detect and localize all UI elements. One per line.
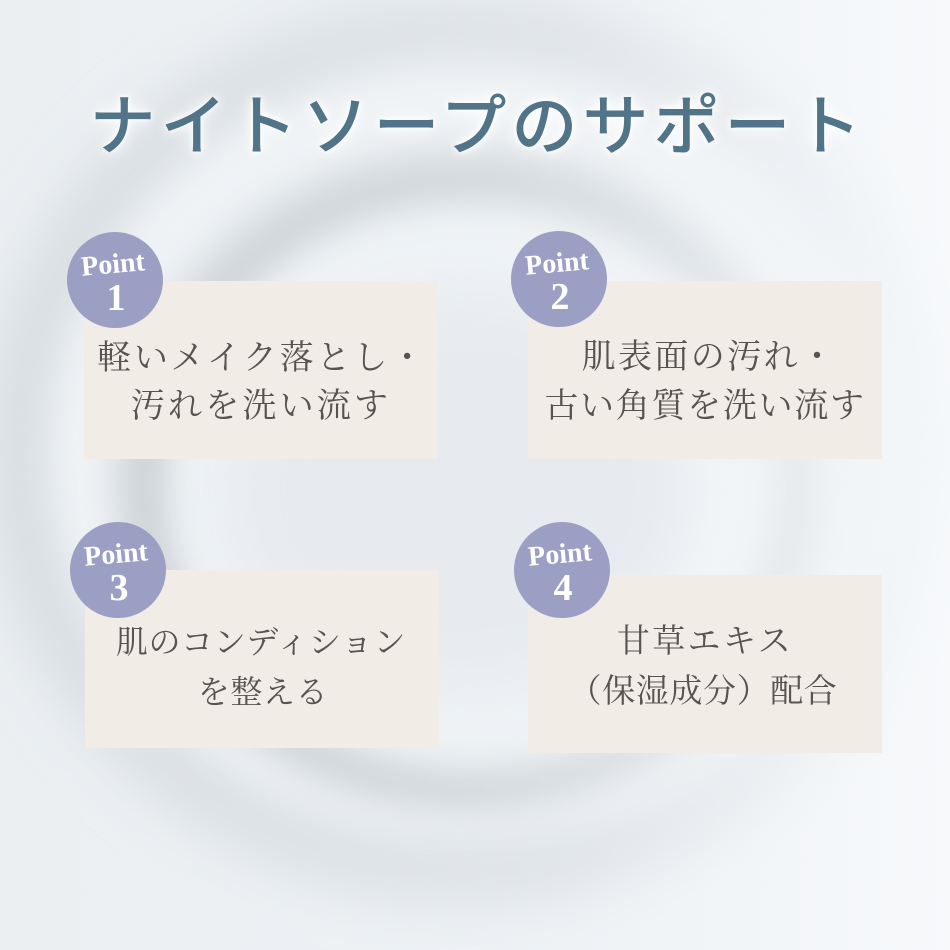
panel: point 2 — [528, 281, 882, 459]
text: point 4 description: （保湿成分）配合 — [569, 674, 837, 710]
panel: point 3 — [85, 570, 439, 748]
text: point 3 description: 肌のコンディション — [116, 624, 406, 660]
badge: point 3: 3 — [110, 567, 128, 609]
badge: point 4 — [514, 522, 610, 618]
badge: point 1: Point — [80, 246, 146, 283]
text: point 4 description: 甘草エキス — [617, 624, 793, 660]
text: point 2 description — [544, 339, 866, 425]
badge: point 2: 2 — [550, 276, 570, 318]
panel: point 4 — [528, 575, 882, 753]
panel: point 1 — [84, 281, 438, 459]
badge: point 4: 4 — [554, 567, 572, 609]
badge: point 4: Point — [527, 536, 593, 573]
text: point 4 description — [569, 624, 837, 710]
title: ナイトソープのサポート — [89, 89, 867, 163]
text: point 3 description — [116, 624, 406, 710]
text: point 1 description — [97, 340, 427, 425]
badge: point 1: 1 — [106, 277, 126, 319]
text: point 1 description: 汚れを洗い流す — [131, 388, 391, 425]
text: point 3 description: を整える — [198, 674, 328, 710]
text: point 1 description: 軽いメイク落とし・ — [97, 340, 427, 377]
badge: point 3 — [70, 522, 166, 618]
badge: point 2 — [511, 231, 607, 327]
text: point 2 description: 肌表面の汚れ・ — [582, 339, 836, 376]
text: point 2 description: 古い角質を洗い流す — [544, 388, 866, 425]
badge: point 2: Point — [524, 245, 590, 282]
badge: point 3: Point — [83, 536, 149, 573]
badge: point 1 — [67, 232, 163, 328]
